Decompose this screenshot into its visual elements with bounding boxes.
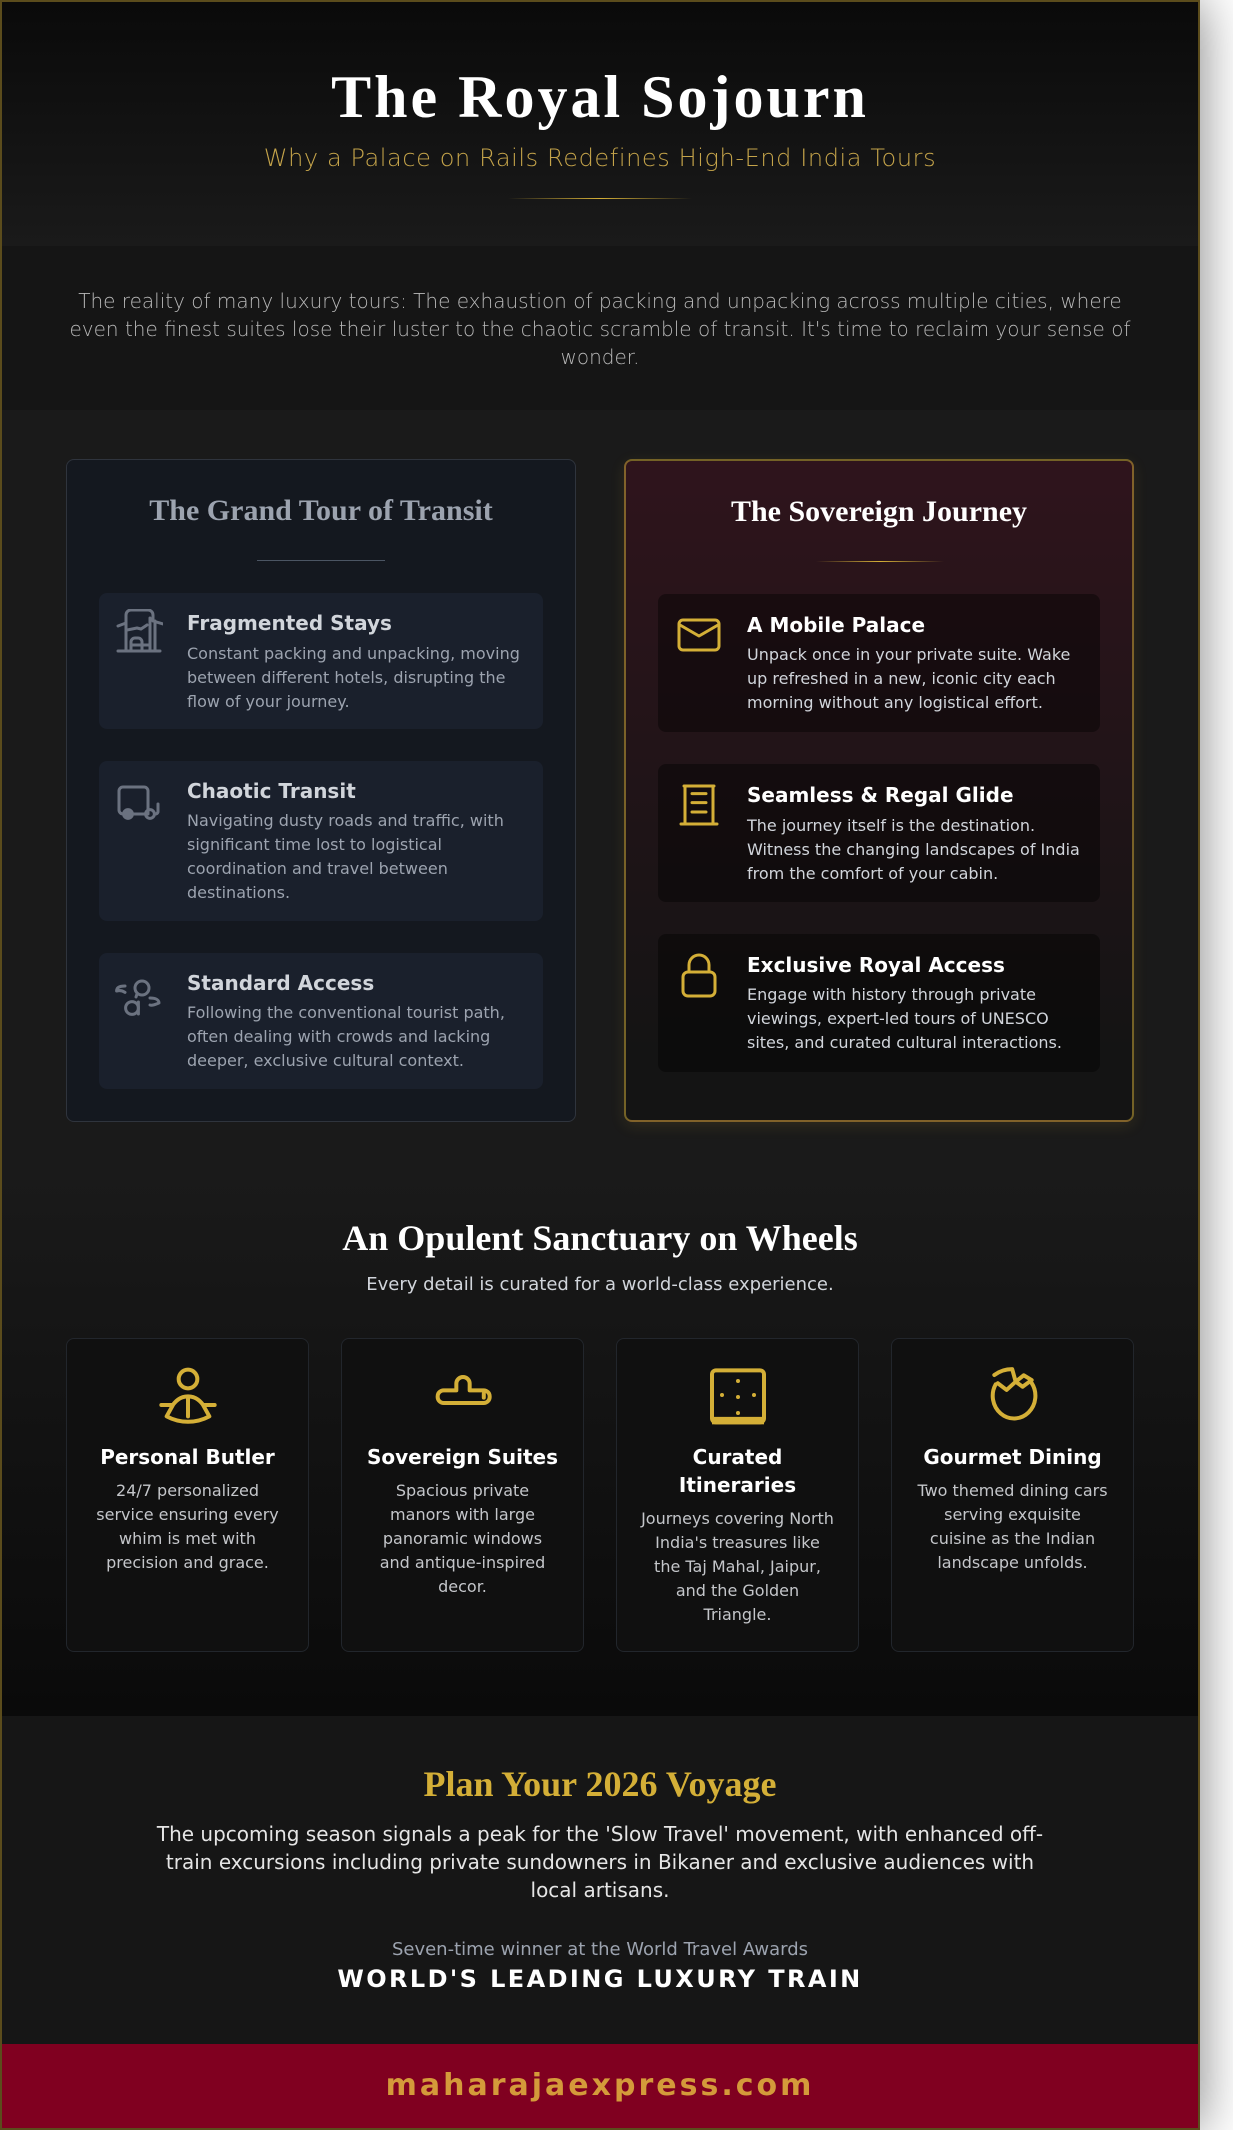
item text: sites, and curated cultural interactions.: [747, 1033, 1062, 1052]
card text: decor.: [438, 1577, 487, 1596]
card text: Spacious private: [396, 1481, 529, 1500]
card text: India's treasures like: [655, 1533, 820, 1552]
item title: A Mobile Palace: [747, 613, 925, 637]
card text: the Taj Mahal, Jaipur,: [654, 1557, 821, 1576]
item text: coordination and travel between: [187, 859, 448, 878]
card text: [917, 1481, 1108, 1572]
item title: Standard Access: [187, 971, 374, 995]
item text: between different hotels, disrupting the: [187, 668, 505, 687]
card title: Personal Butler: [100, 1445, 275, 1469]
card text: manors with large: [390, 1505, 535, 1524]
item title: Exclusive Royal Access: [747, 953, 1005, 977]
panel divider: [257, 560, 385, 561]
card text: and the Golden: [676, 1581, 799, 1600]
intro background: [2, 246, 1198, 410]
icon: dining: [990, 1367, 1038, 1420]
card title: [679, 1445, 796, 1497]
icon: vehicle: [118, 786, 160, 820]
card: gourmet dining: [891, 1338, 1134, 1652]
footer band: [2, 2044, 1198, 2128]
item: chaotic transit: [99, 761, 543, 921]
item text: destinations.: [187, 883, 290, 902]
title: The Royal Sojourn: [331, 64, 869, 130]
item text: significant time lost to logistical: [187, 835, 442, 854]
intro text: even the finest suites lose their luster to the chaotic scramble of transit. It's time to reclaim your sense of: [69, 317, 1130, 341]
intro text: [69, 289, 1130, 369]
features background: [2, 1170, 1198, 1716]
CTA text: [156, 1822, 1043, 1902]
card text: [96, 1481, 279, 1572]
intro text: The reality of many luxury tours: The exhaustion of packing and unpacking across multiple cities, where: [78, 289, 1122, 313]
icon: lock: [682, 954, 716, 998]
item: a mobile palace: [658, 594, 1100, 732]
card text: and antique-inspired: [380, 1553, 545, 1572]
CTA background: [2, 1716, 1198, 2044]
item: standard access: [99, 953, 543, 1089]
item text: [187, 1003, 505, 1070]
card text: panoramic windows: [383, 1529, 542, 1548]
card text: service ensuring every: [96, 1505, 279, 1524]
CTA text: train excursions including private sundowners in Bikaner and exclusive audiences with: [166, 1850, 1034, 1874]
award title: WORLD'S LEADING LUXURY TRAIN: [337, 1965, 863, 1993]
panel heading: The Sovereign Journey: [731, 495, 1027, 528]
card text: cuisine as the Indian: [930, 1529, 1095, 1548]
item text: Unpack once in your private suite. Wake: [747, 645, 1070, 664]
item text: [747, 985, 1062, 1052]
item text: up refreshed in a new, iconic city each: [747, 669, 1056, 688]
card text: landscape unfolds.: [937, 1553, 1088, 1572]
card: curated itineraries: [616, 1338, 859, 1652]
card title: Curated: [693, 1445, 782, 1469]
comparison background: [2, 410, 1198, 1170]
icon: scroll: [680, 784, 718, 826]
card text: Journeys covering North: [641, 1509, 834, 1528]
item text: Following the conventional tourist path,: [187, 1003, 505, 1022]
item text: Engage with history through private: [747, 985, 1036, 1004]
icon: bed: [436, 1375, 492, 1405]
item text: [187, 811, 504, 902]
item text: [747, 645, 1070, 712]
card text: serving exquisite: [944, 1505, 1081, 1524]
item text: flow of your journey.: [187, 692, 350, 711]
section heading: An Opulent Sanctuary on Wheels: [342, 1218, 858, 1258]
item text: from the comfort of your cabin.: [747, 864, 998, 883]
card title: Gourmet Dining: [923, 1445, 1102, 1469]
CTA text: The upcoming season signals a peak for the 'Slow Travel' movement, with enhanced off-: [157, 1822, 1043, 1846]
panel: the grand tour of transit: [66, 459, 576, 1122]
panel divider: [816, 561, 944, 562]
item: seamless and regal glide: [658, 764, 1100, 902]
item text: [187, 644, 520, 711]
card text: [640, 1509, 834, 1624]
header divider: [508, 198, 692, 199]
icon: crowd: [115, 980, 160, 1016]
item text: The journey itself is the destination.: [747, 816, 1035, 835]
intro text: wonder.: [560, 345, 640, 369]
card text: 24/7 personalized: [116, 1481, 259, 1500]
item text: often dealing with crowds and lacking: [187, 1027, 490, 1046]
CTA heading: Plan Your 2026 Voyage: [423, 1764, 777, 1804]
item text: Navigating dusty roads and traffic, with: [187, 811, 504, 830]
award note: Seven-time winner at the World Travel Awards: [392, 1939, 808, 1960]
card text: whim is met with: [119, 1529, 256, 1548]
card text: precision and grace.: [106, 1553, 269, 1572]
card: sovereign suites: [341, 1338, 584, 1652]
footer URL: maharajaexpress.com: [386, 2068, 814, 2102]
item title: Seamless & Regal Glide: [747, 783, 1014, 807]
icon: envelope: [678, 618, 720, 652]
section subheading: Every detail is curated for a world-class experience.: [366, 1274, 834, 1295]
item: exclusive royal access: [658, 934, 1100, 1072]
item text: Constant packing and unpacking, moving: [187, 644, 520, 663]
item text: Witness the changing landscapes of India: [747, 840, 1080, 859]
icon: butler: [159, 1368, 217, 1424]
card title: Itineraries: [679, 1473, 796, 1497]
item text: [746, 816, 1080, 883]
item title: Fragmented Stays: [187, 611, 392, 635]
header background: [2, 2, 1198, 246]
card title: Sovereign Suites: [367, 1445, 558, 1469]
icon: hotel: [116, 609, 163, 652]
item text: deeper, exclusive cultural context.: [187, 1051, 464, 1070]
subtitle: Why a Palace on Rails Redefines High-End India Tours: [264, 144, 936, 172]
card text: [380, 1481, 545, 1596]
card text: Two themed dining cars: [917, 1481, 1108, 1500]
panel heading: The Grand Tour of Transit: [149, 494, 493, 527]
panel: the sovereign journey: [624, 459, 1134, 1122]
card text: Triangle.: [704, 1605, 771, 1624]
item: fragmented stays: [99, 593, 543, 729]
icon: map: [710, 1368, 766, 1424]
item text: viewings, expert-led tours of UNESCO: [747, 1009, 1049, 1028]
card: personal butler: [66, 1338, 309, 1652]
item title: Chaotic Transit: [187, 779, 356, 803]
item text: morning without any logistical effort.: [747, 693, 1043, 712]
CTA text: local artisans.: [531, 1878, 669, 1902]
